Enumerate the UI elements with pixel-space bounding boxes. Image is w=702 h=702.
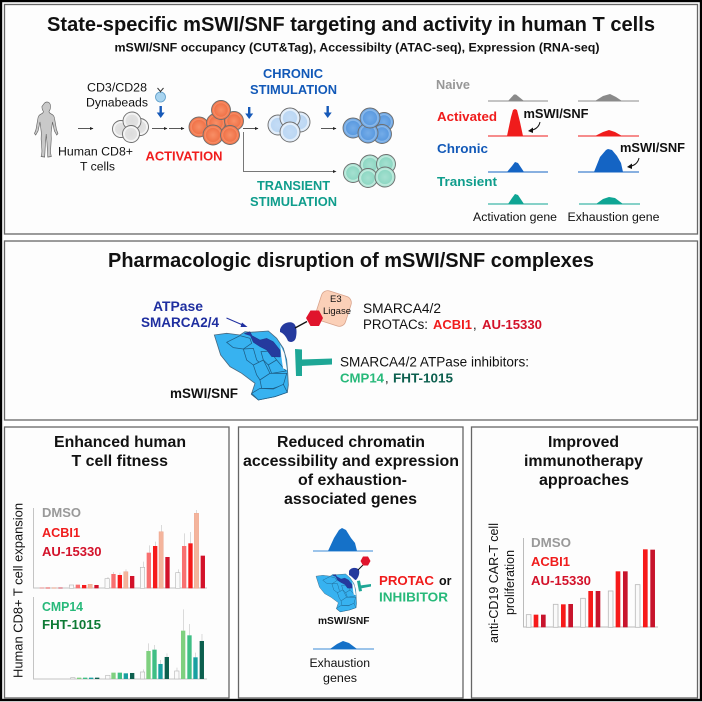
- axis label: Human CD8+ T cell expansion: [10, 503, 26, 678]
- track: exhaustion high: [313, 528, 373, 551]
- legend: DMSO ACBI1 AU-15330: DMSO: [531, 535, 571, 550]
- label: CD3/CD28 Dynabeads: CD3/CD28: [87, 80, 147, 94]
- legend: CMP14 FHT-1015: CMP14: [42, 599, 84, 614]
- gene labels: Exhaustion gene: [568, 210, 660, 224]
- text: PROTACs: ,: [473, 317, 477, 332]
- gene labels: Activation gene: [473, 210, 557, 224]
- panel: enhanced T cell fitness: [4, 427, 229, 698]
- arrows: main flow: [78, 127, 336, 173]
- heading: associated genes: [284, 491, 417, 508]
- heading: Improved: [548, 434, 619, 451]
- text: PROTACs: [363, 301, 542, 332]
- text: ATPase inhibitors: [340, 354, 529, 386]
- panel: state-specific targeting: [4, 4, 698, 234]
- panel: pharmacologic disruption: [4, 241, 698, 420]
- icon: human figure: [35, 102, 58, 157]
- legend: DMSO ACBI1 AU-15330: ACBI1: [42, 525, 80, 540]
- heading: Pharmacologic disruption of mSWI/SNF complexes: [108, 250, 594, 272]
- label: transient stimulation: [250, 178, 337, 209]
- panel: reduced chromatin accessibility: [238, 427, 463, 698]
- text: ATPase inhibitors: SMARCA4/2 ATPase inhibitors:: [340, 354, 529, 370]
- state labels: [436, 77, 498, 189]
- text: PROTAC or INHIBITOR: INHIBITOR: [379, 590, 448, 604]
- heading: T cell fitness: [72, 453, 168, 470]
- label: chronic stimulation: CHRONIC: [263, 66, 324, 81]
- icon: inhibitor T-bar: [295, 349, 332, 376]
- state labels: Naive: [436, 77, 470, 92]
- state labels: Transient: [437, 174, 498, 189]
- callout: mSWI/SNF chronic: [620, 140, 685, 169]
- label: CD3/CD28 Dynabeads: Dynabeads: [86, 96, 148, 110]
- legend: DMSO ACBI1 AU-15330: [531, 535, 591, 588]
- callout: mSWI/SNF chronic: mSWI/SNF: [620, 140, 685, 155]
- axis label: proliferation: [503, 550, 517, 615]
- bar chart: inhibitor T cell expansion: [34, 597, 207, 679]
- icon: PROTAC with E3 ligase: [280, 289, 353, 342]
- text: PROTACs: PROTACs:: [363, 317, 428, 332]
- legend: CMP14 FHT-1015: FHT-1015: [42, 617, 101, 632]
- heading: [243, 434, 459, 508]
- legend: DMSO ACBI1 AU-15330: ACBI1: [531, 554, 570, 569]
- text: PROTAC or INHIBITOR: [379, 573, 452, 604]
- text: ATPase inhibitors: FHT-1015: [393, 370, 453, 386]
- state labels: Activated: [437, 109, 497, 124]
- subtitle: mSWI/SNF occupancy (CUT&Tag), Accessibilty (ATAC-seq), Expression (RNA-seq): [114, 40, 600, 54]
- bar chart: CAR-T proliferation: [524, 535, 658, 627]
- callout: mSWI/SNF activated: mSWI/SNF: [524, 106, 589, 121]
- track: exhaustion low: [313, 641, 374, 649]
- legend: DMSO ACBI1 AU-15330: DMSO: [42, 505, 81, 520]
- cells: light blue: [268, 108, 310, 142]
- label: Human CD8+ T cells: [58, 144, 133, 174]
- label: chronic stimulation: STIMULATION: [250, 82, 337, 97]
- heading: Reduced chromatin: [277, 434, 425, 451]
- label: mSWI/SNF: mSWI/SNF: [170, 386, 238, 401]
- label: ATPase SMARCA2/4: ATPase: [153, 299, 203, 314]
- cells: activated orange: [189, 100, 244, 145]
- label: Human CD8+ T cells: T cells: [80, 160, 115, 174]
- heading: accessibility and expression: [243, 453, 459, 470]
- arrow: to ATPase: [226, 318, 248, 327]
- text: PROTACs: AU-15330: [482, 317, 542, 332]
- label: transient stimulation: STIMULATION: [250, 194, 337, 209]
- label: exhaustion genes: genes: [323, 671, 357, 685]
- icon: complex with PROTAC and inhibitor: [316, 556, 371, 612]
- panel: improved immunotherapy: [472, 427, 698, 698]
- callout: mSWI/SNF activated: [524, 106, 589, 133]
- axis label: [487, 523, 517, 643]
- cells: chronic blue: [343, 108, 394, 144]
- label: transient stimulation: TRANSIENT: [257, 178, 330, 193]
- text: PROTAC or INHIBITOR: PROTAC: [379, 573, 434, 588]
- label: exhaustion genes: Exhaustion: [310, 656, 370, 670]
- bar chart: PROTAC T cell expansion: [34, 505, 207, 588]
- legend: DMSO ACBI1 AU-15330: AU-15330: [42, 544, 102, 559]
- text: ATPase inhibitors: ,: [385, 370, 389, 386]
- legend: CMP14 FHT-1015: [42, 599, 101, 632]
- legend: DMSO ACBI1 AU-15330: [42, 505, 102, 559]
- title: State-specific mSWI/SNF targeting and activity in human T cells: [47, 14, 655, 36]
- text: PROTACs: ACBI1: [433, 317, 472, 332]
- text: PROTACs: SMARCA4/2: [363, 301, 441, 316]
- heading: Enhanced human: [54, 434, 186, 451]
- cells: resting gray: [112, 112, 148, 142]
- label: chronic stimulation: [250, 66, 337, 97]
- icon: PROTAC with E3 ligase: E3: [330, 294, 342, 305]
- label: mSWI/SNF: mSWI/SNF: [318, 616, 370, 627]
- heading: [524, 434, 643, 489]
- icon: bead with antibodies: [156, 88, 166, 102]
- icons: blue stimulation arrows: [157, 106, 332, 119]
- label: ATPase SMARCA2/4: SMARCA2/4: [141, 315, 219, 330]
- heading: approaches: [539, 472, 629, 489]
- label: exhaustion genes: [310, 656, 370, 685]
- cells: transient teal: [344, 154, 396, 188]
- heading: [54, 434, 186, 470]
- icon: mSWI/SNF complex: [214, 331, 288, 400]
- label: ACTIVATION: ACTIVATION: [146, 150, 222, 164]
- text: PROTAC or INHIBITOR: or: [439, 573, 452, 588]
- heading: immunotherapy: [524, 453, 643, 470]
- text: ATPase inhibitors: CMP14: [340, 370, 385, 386]
- state labels: Chronic: [437, 141, 488, 156]
- label: ATPase SMARCA2/4: [141, 299, 219, 330]
- heading: of exhaustion-: [298, 472, 407, 489]
- tracks: activation gene: [488, 94, 548, 204]
- label: Human CD8+ T cells: Human CD8+: [58, 144, 133, 158]
- gene labels: [473, 210, 660, 224]
- legend: DMSO ACBI1 AU-15330: AU-15330: [531, 573, 591, 588]
- tracks: exhaustion gene: [578, 94, 640, 204]
- icon: PROTAC with E3 ligase: Ligase: [323, 306, 351, 317]
- label: CD3/CD28 Dynabeads: [86, 80, 148, 110]
- axis label: anti-CD19 CAR-T cell: [487, 523, 501, 643]
